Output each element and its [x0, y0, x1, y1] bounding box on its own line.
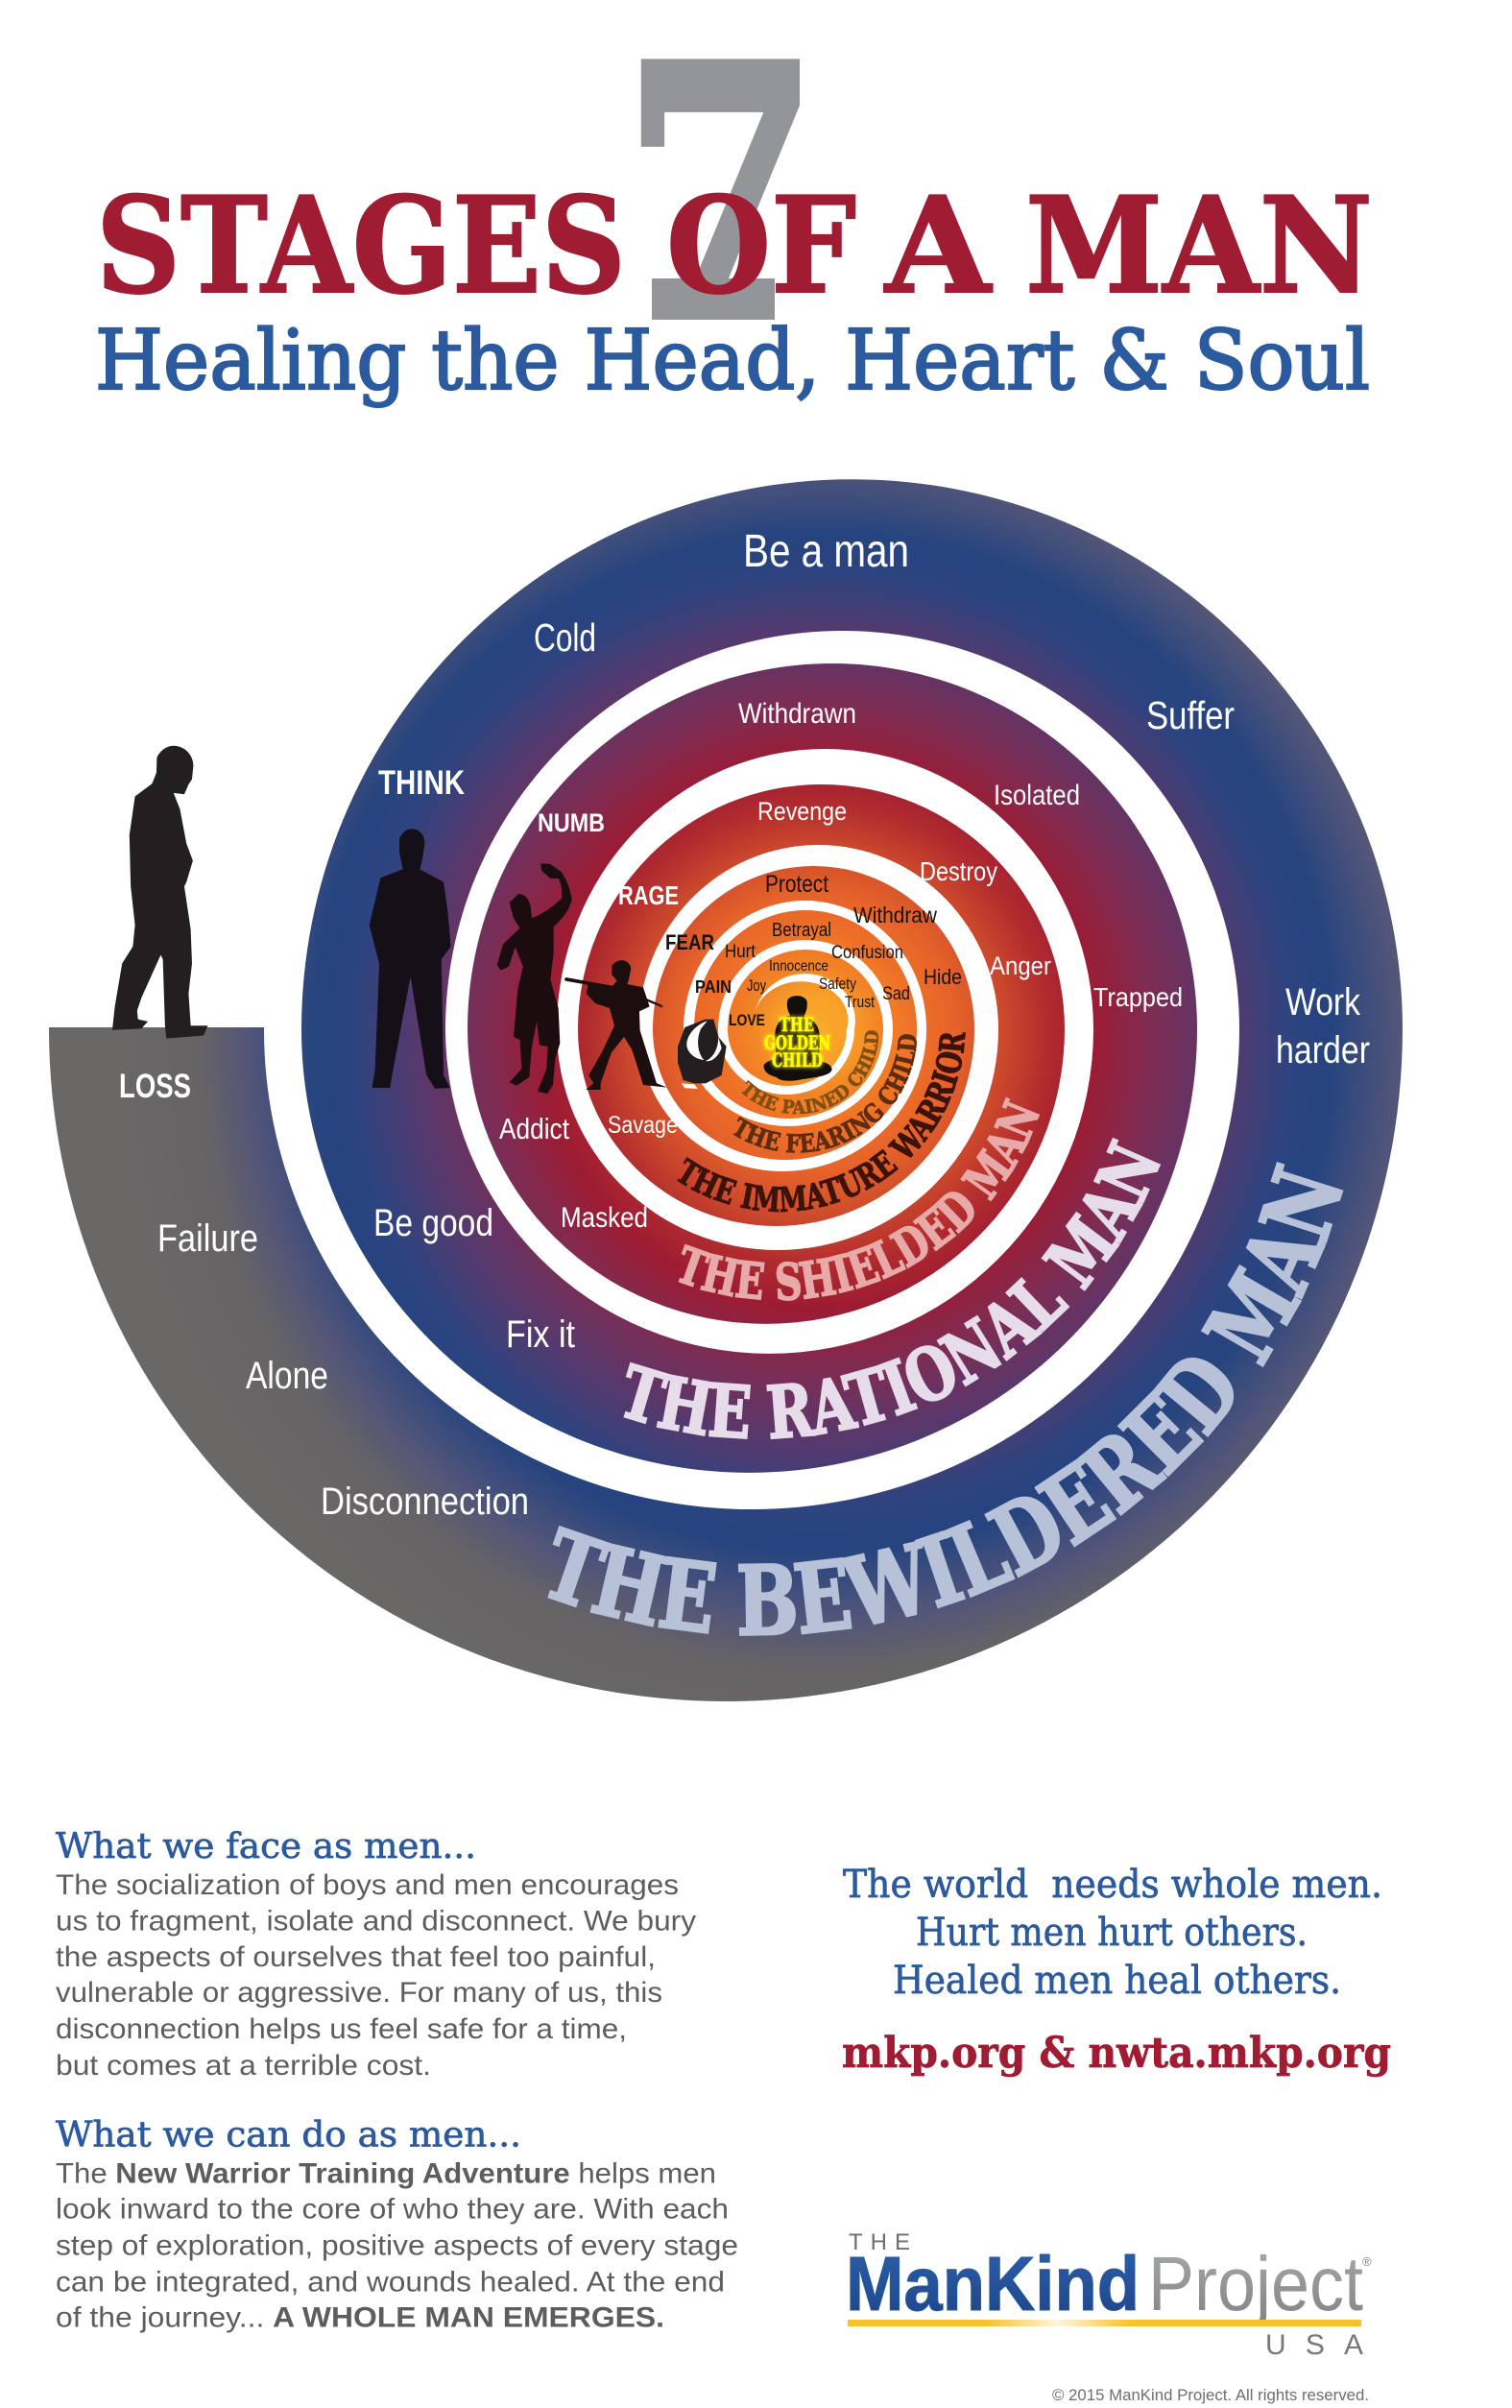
dark inner ring labels: Innocence	[769, 958, 828, 975]
white ring labels: LOSS	[119, 1068, 191, 1105]
white ring labels: Withdrawn	[738, 698, 856, 730]
dark inner ring labels: PAIN	[695, 977, 732, 997]
white ring labels: Suffer	[1146, 693, 1235, 737]
white ring labels: Cold	[534, 615, 596, 660]
text block: what we can do as men	[56, 2116, 738, 2333]
heading: what we can do as men: What we can do as men...	[56, 2116, 521, 2155]
paragraph: socialization: disconnection helps us feel safe for a time,	[56, 2013, 627, 2045]
subtitle: Healing the Head, Heart & Soul	[95, 313, 1370, 409]
paragraph: new warrior training adventure: The New Warrior Training Adventure helps men	[56, 2158, 716, 2189]
the fearing child: THE FEARING CHILD	[733, 1034, 917, 1153]
paragraph: socialization: The socialization of boys and men encourages	[56, 1869, 679, 1901]
silhouette: man in suit	[370, 829, 451, 1089]
silhouette: crouching boy	[678, 1020, 727, 1090]
main title: stages of a man: STAGES	[96, 167, 626, 324]
copyright: © 2015 ManKind Project. All rights reserved.	[1052, 2387, 1369, 2404]
white ring labels: Masked	[561, 1202, 648, 1234]
golden child label: CHILD	[772, 1049, 823, 1072]
spiral gradient body	[49, 479, 1403, 1701]
heading: what we face as men: What we face as men...	[56, 1827, 476, 1866]
white ring labels: Revenge	[757, 797, 847, 826]
main title: stages of a man: OF	[666, 167, 856, 324]
the bewildered man: THE BEWILDERED MAN	[547, 1162, 1344, 1636]
white ring labels: Anger	[990, 951, 1051, 980]
paragraph: new warrior training adventure: of the journey... A WHOLE MAN EMERGES.	[56, 2302, 664, 2333]
dark inner ring labels: Hide	[924, 965, 962, 989]
golden child label: CHILD	[772, 1049, 823, 1072]
the rational man: THE RATIONAL MAN	[624, 1137, 1162, 1440]
logo: the mankind project usa: Project	[1148, 2241, 1363, 2326]
golden child label: GOLDEN	[764, 1032, 830, 1054]
the shielded man: THE SHIELDED MAN	[678, 1096, 1041, 1301]
golden child label: THE	[780, 1014, 814, 1036]
dark inner ring labels: Hurt	[725, 942, 756, 962]
white spiral strip	[264, 631, 1239, 1509]
paragraph: new warrior training adventure: step of exploration, positive aspects of every stage	[56, 2229, 738, 2262]
white ring labels: Isolated	[994, 780, 1080, 811]
paragraph: new warrior training adventure: look inward to the core of who they are. With each	[56, 2193, 729, 2226]
white ring labels: NUMB	[538, 808, 605, 837]
text block: what we face as men	[56, 1827, 696, 2082]
the pained child: THE PAINED CHILD	[741, 1030, 879, 1114]
silhouette: warrior with staff	[566, 960, 667, 1090]
white ring labels: Disconnection	[321, 1481, 529, 1523]
logo: the mankind project usa	[846, 2229, 1372, 2361]
dark inner ring labels: FEAR	[665, 930, 714, 954]
dark inner ring labels: Safety	[819, 975, 856, 993]
golden child label: THE	[780, 1014, 814, 1036]
callout: whole men: Healed men heal others.	[893, 1959, 1341, 2003]
spiral diagram	[49, 479, 1403, 1701]
paragraph: new warrior training adventure: can be integrated, and wounds healed. At the end	[56, 2266, 725, 2299]
white ring labels: Destroy	[920, 856, 997, 886]
white ring labels: Work	[1285, 981, 1361, 1023]
stage names on curved paths	[547, 1030, 1344, 1636]
golden child label: GOLDEN	[764, 1032, 830, 1054]
dark inner ring labels: Betrayal	[772, 920, 831, 941]
dark inner ring labels: Sad	[882, 984, 910, 1004]
title block	[95, 0, 1373, 409]
white ring labels: RAGE	[618, 880, 679, 910]
white ring labels: Addict	[499, 1112, 569, 1145]
white ring labels: Savage	[608, 1112, 678, 1139]
logo: the mankind project usa: ®	[1362, 2254, 1372, 2269]
dark inner ring labels: Confusion	[831, 942, 903, 963]
dark inner ring labels: Trust	[845, 993, 875, 1011]
logo: the mankind project usa: THE	[849, 2229, 910, 2255]
silhouette: man with raised arm	[497, 863, 572, 1094]
main title: stages of a man: MAN	[1025, 167, 1373, 324]
the immature warrior: THE IMMATURE WARRIOR	[677, 1031, 966, 1213]
callout: whole men	[843, 1863, 1382, 2003]
white ring labels: Be a man	[743, 526, 909, 577]
main title: stages of a man: A	[883, 167, 993, 324]
callout: whole men: Hurt men hurt others.	[916, 1911, 1308, 1955]
dark inner ring labels	[665, 871, 962, 1029]
paragraph: socialization: us to fragment, isolate and disconnect. We bury	[56, 1905, 696, 1938]
white ring labels: Fix it	[506, 1313, 575, 1356]
dark inner ring labels: LOVE	[729, 1011, 765, 1029]
logo: the mankind project usa: USA	[1265, 2329, 1363, 2361]
white ring labels	[119, 526, 1370, 1523]
silhouette: golden child sitting	[764, 996, 832, 1081]
callout: whole men: The world needs whole men.	[843, 1863, 1382, 1907]
white ring labels: Trapped	[1093, 982, 1183, 1012]
paragraph: new warrior training adventure	[56, 2158, 738, 2333]
dark inner ring labels: Protect	[765, 871, 828, 898]
logo: the mankind project usa: ManKind	[846, 2241, 1140, 2326]
paragraph: socialization: the aspects of ourselves that feel too painful,	[56, 1941, 656, 1973]
paragraph: socialization: vulnerable or aggressive. For many of us, this	[56, 1977, 662, 2009]
silhouette: man walking on ledge	[112, 746, 208, 1039]
main title: stages of a man	[96, 167, 1373, 324]
white ring labels: THINK	[378, 764, 465, 802]
white ring labels: Alone	[246, 1355, 328, 1397]
white ring labels: Be good	[373, 1202, 493, 1244]
website links: mkp.org & nwta.mkp.org	[842, 2029, 1391, 2078]
paragraph: socialization: but comes at a terrible cost.	[56, 2050, 431, 2082]
numeral 7: 7	[620, 0, 822, 400]
white ring labels: Failure	[157, 1217, 258, 1260]
golden child label	[764, 1014, 830, 1072]
dark inner ring labels: Withdraw	[853, 903, 937, 927]
white ring labels: harder	[1276, 1029, 1370, 1072]
dark inner ring labels: Joy	[747, 976, 766, 995]
paragraph: socialization	[56, 1869, 696, 2082]
